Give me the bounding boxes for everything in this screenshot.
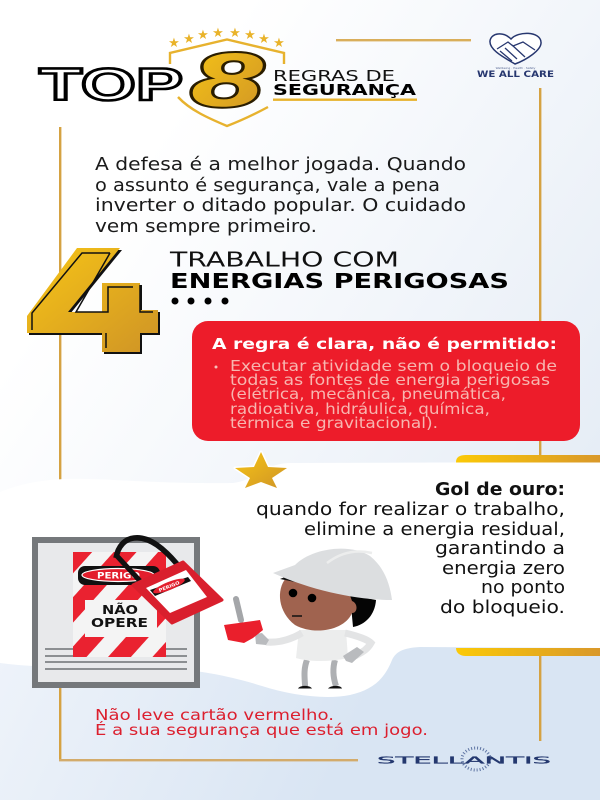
big number 4 — [27, 248, 160, 354]
red closing text: É a sua segurança que está em jogo. — [95, 720, 428, 739]
rule list text — [214, 357, 557, 432]
golden goal text: elimine a energia residual, — [304, 520, 565, 540]
golden goal text: garantindo a — [435, 539, 565, 559]
helmet — [273, 549, 392, 600]
header badge: shield and stars: ★ — [183, 32, 195, 47]
gloves — [255, 633, 364, 663]
logo: we all care — [477, 33, 554, 80]
header badge: shield and stars — [168, 26, 285, 126]
logo: stellantis: STELLANTIS — [377, 756, 551, 766]
head — [280, 575, 356, 631]
intro text: vem sempre primeiro. — [95, 217, 317, 237]
panel: red rule box — [192, 321, 580, 441]
heading: trabalho com: TRABALHO COM — [169, 248, 399, 272]
four dots — [172, 298, 228, 304]
rule list text: térmica e gravitacional). — [230, 414, 438, 432]
rule list text: (elétrica, mecânica, pneumática, — [230, 385, 506, 403]
padlock: PERIGO — [158, 580, 181, 594]
golden goal text: quando for realizar o trabalho, — [256, 500, 565, 520]
header badge: shield and stars: ★ — [212, 26, 224, 41]
heading: energias perigosas: ENERGIAS PERIGOSAS — [170, 269, 509, 293]
golden goal text — [256, 480, 565, 618]
header badge: shield and stars: ★ — [168, 36, 180, 51]
red closing text — [95, 706, 428, 739]
header badge: shield and stars: ★ — [197, 28, 209, 43]
intro text: inverter o ditado popular. O cuidado — [95, 196, 466, 216]
padlock — [116, 538, 222, 623]
tag: PERIGO — [97, 572, 140, 582]
legs — [304, 660, 336, 686]
white wave panel — [0, 462, 600, 697]
golden goal text: Gol de ouro: — [435, 480, 565, 500]
gold bar bottom of panel — [456, 648, 600, 656]
title: regras de: REGRAS DE — [273, 67, 395, 85]
intro text — [95, 155, 466, 237]
title: segurança: SEGURANÇA — [273, 81, 416, 99]
lower blue area — [0, 640, 600, 800]
red closing text: Não leve cartão vermelho. — [95, 706, 334, 724]
illustration: danger tag board — [35, 538, 222, 685]
rule heading: A regra é clara, não é permitido: — [212, 335, 557, 353]
title: TOP: TOP — [39, 59, 183, 110]
title: big 8: 8 — [191, 38, 264, 123]
key — [236, 599, 241, 620]
golden goal text: do bloqueio. — [440, 598, 565, 618]
title underline — [273, 98, 417, 101]
logo: we all care: WE ALL CARE — [477, 70, 554, 80]
rule list text: Executar atividade sem o bloqueio de — [230, 357, 557, 375]
body — [296, 630, 348, 661]
intro text: o assunto é segurança, vale a pena — [95, 176, 440, 196]
rule list text: radioativa, hidráulica, química, — [230, 400, 490, 418]
header badge: shield and stars: ★ — [273, 36, 285, 51]
header badge: shield and stars: ★ — [229, 26, 241, 41]
icon: gold star — [235, 452, 287, 488]
tag — [73, 552, 166, 657]
hair — [350, 595, 376, 627]
tag: NÃO — [102, 602, 138, 617]
illustration: worker with hard hat — [224, 549, 392, 688]
logo: stellantis — [377, 748, 551, 770]
header badge: shield and stars: ★ — [244, 28, 256, 43]
tag: OPERE — [91, 615, 148, 630]
logo: we all care: Wellbeing · Health · Safety — [496, 66, 536, 70]
golden goal text: energia zero — [442, 559, 565, 579]
golden goal text: no ponto — [481, 578, 565, 598]
gold frame lines — [59, 39, 541, 761]
header badge: shield and stars: ★ — [258, 32, 270, 47]
arms — [266, 633, 371, 656]
intro text: A defesa é a melhor jogada. Quando — [95, 155, 466, 175]
gold bar top of panel — [456, 455, 600, 462]
rule list text: todas as fontes de energia perigosas — [230, 371, 550, 389]
